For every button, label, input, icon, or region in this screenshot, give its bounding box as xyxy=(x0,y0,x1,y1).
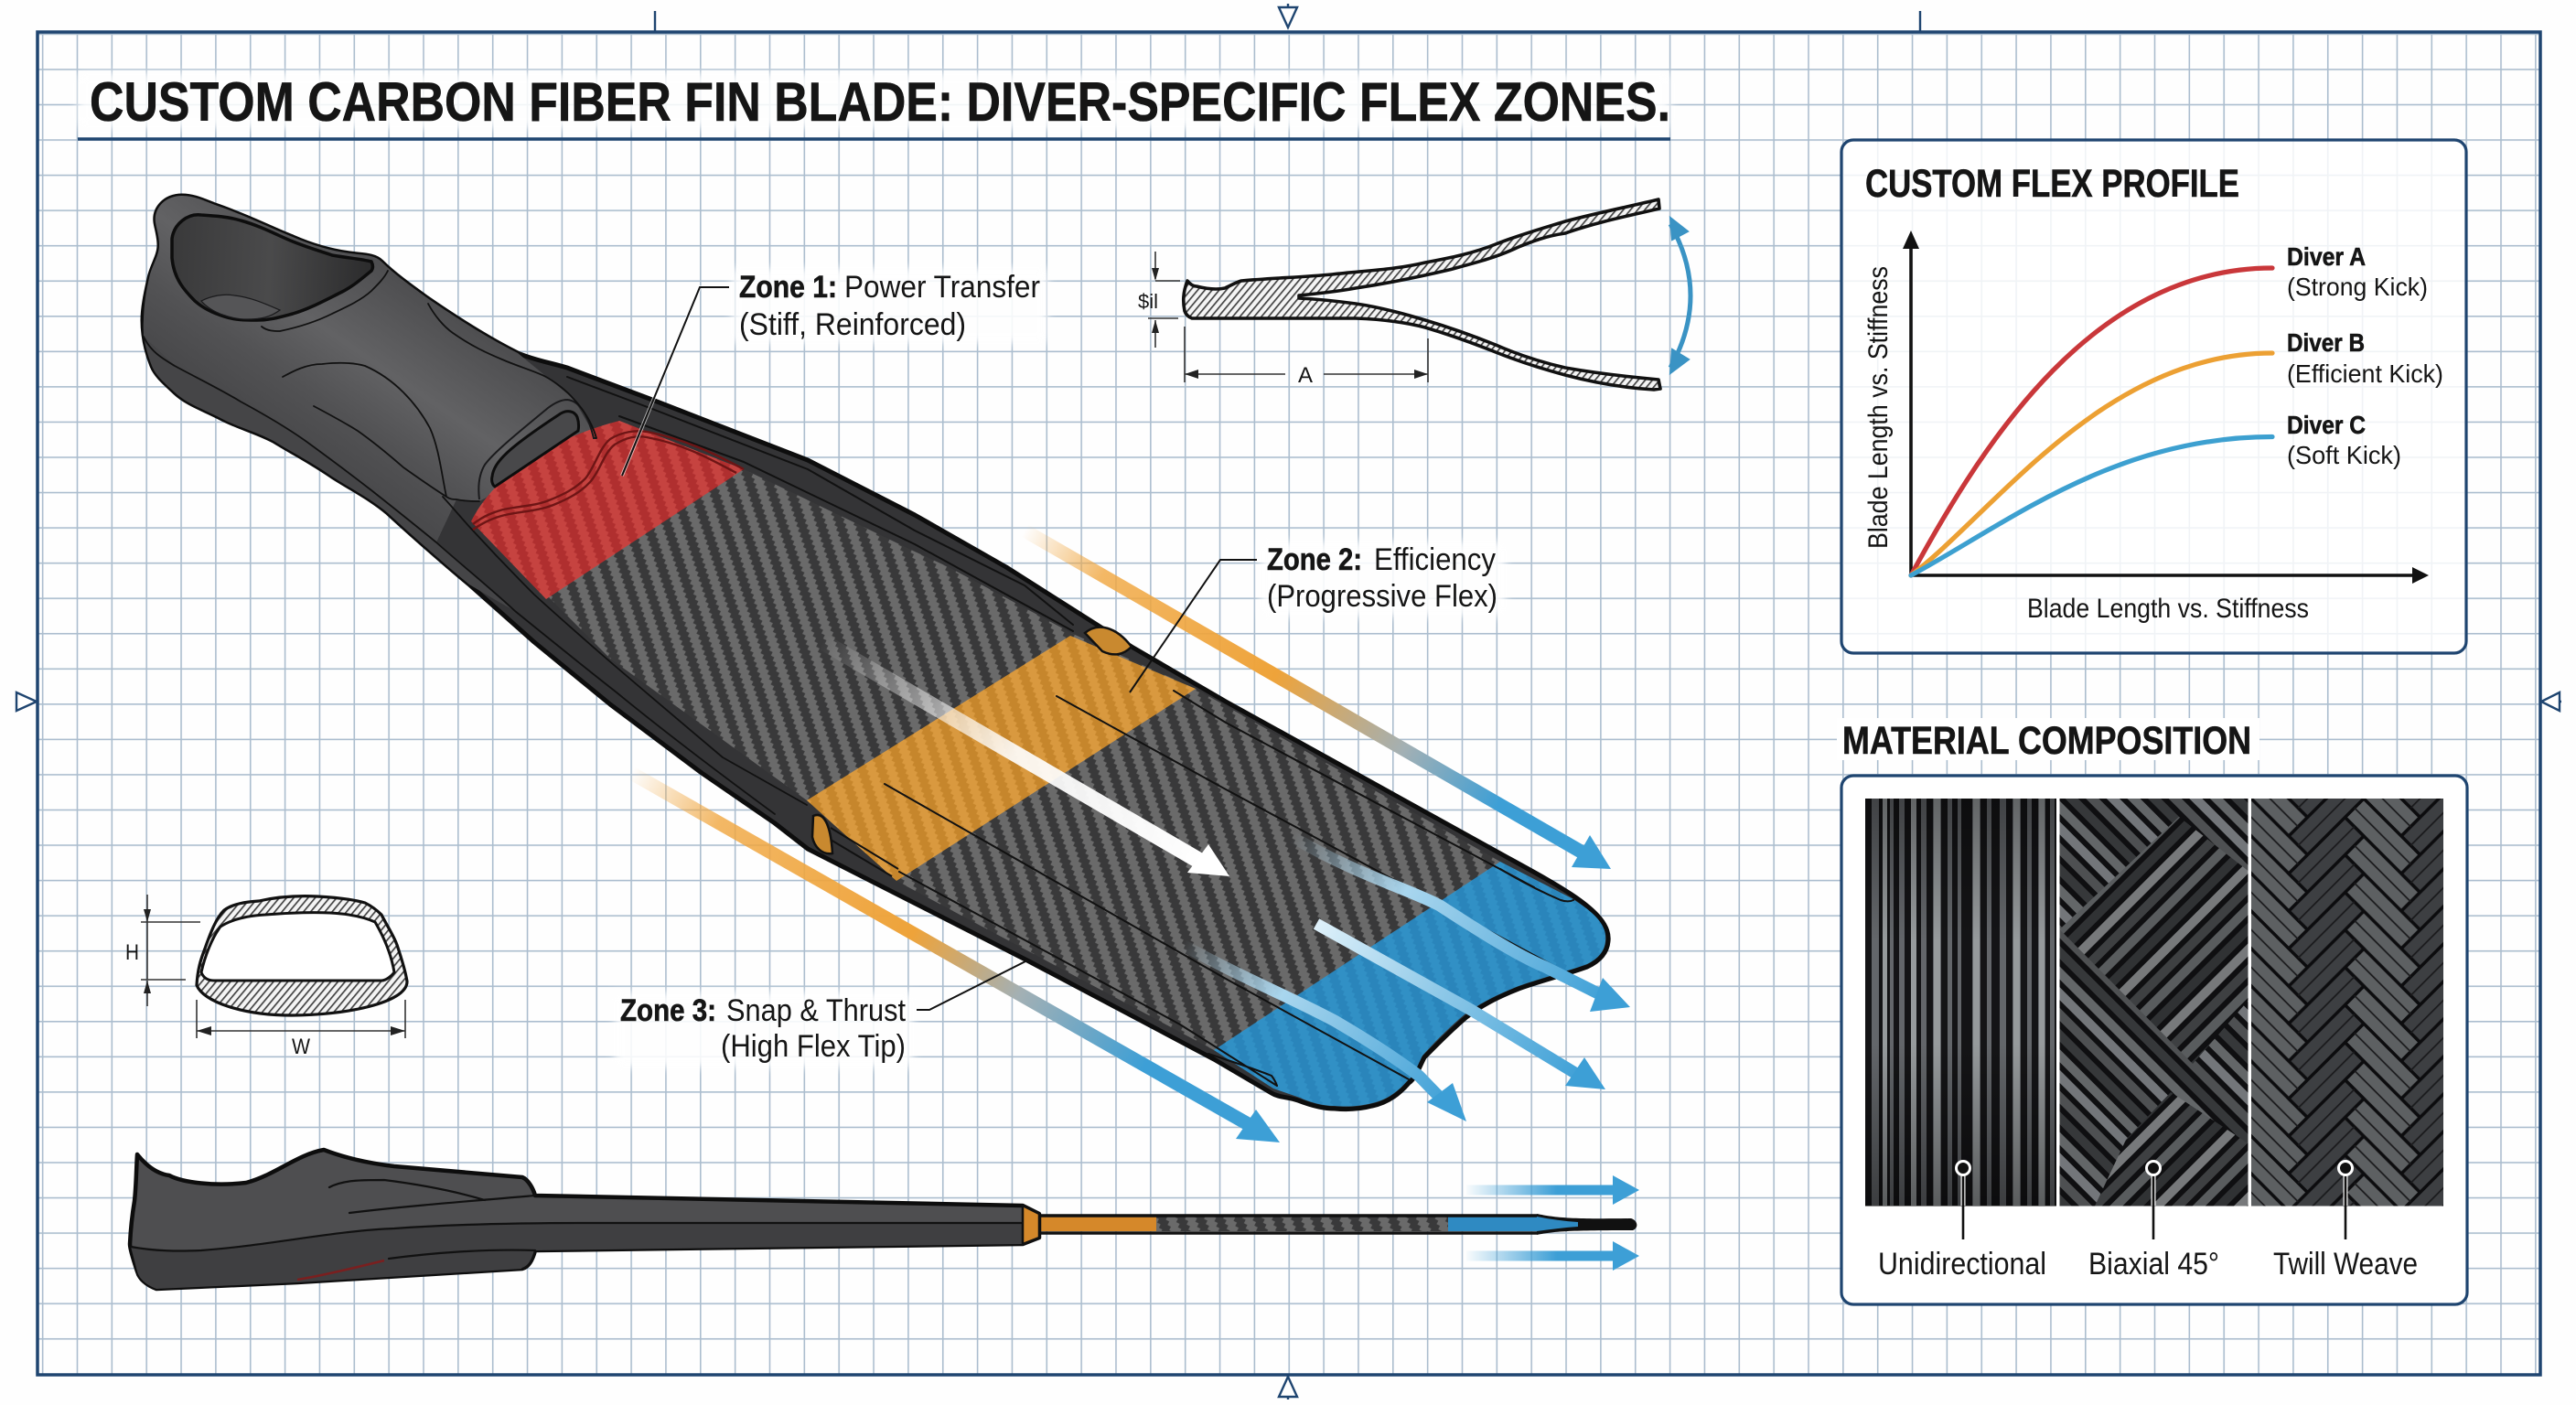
callout: zone 3: Snap & Thrust xyxy=(726,993,906,1028)
legend: diver C: Diver C xyxy=(2287,411,2366,439)
callout: zone 1: Zone 1: xyxy=(739,270,837,305)
side view spar xyxy=(1034,1214,1637,1235)
blade bending cross-section xyxy=(1138,199,1690,390)
heading: material composition: MATERIAL COMPOSITION xyxy=(1842,719,2251,763)
chart: blade length vs stiffness: Blade Length vs. Stiffness xyxy=(1863,266,1894,549)
legend: diver A xyxy=(2287,242,2428,301)
tip rail folds xyxy=(1208,869,1573,1086)
zone ripple lines xyxy=(473,431,744,530)
panel: custom flex profile xyxy=(1841,140,2466,653)
dimension: height H xyxy=(125,895,200,1006)
toe opening xyxy=(478,400,596,499)
foot opening xyxy=(172,215,373,320)
label: biaxial 45: Biaxial 45° xyxy=(2088,1247,2219,1282)
side view flow arrows xyxy=(1466,1175,1639,1271)
fin body outline xyxy=(143,196,1608,1110)
callout: zone 1 xyxy=(622,268,1047,476)
arrows: blade tip flow xyxy=(1183,837,1630,1121)
foot pocket upper xyxy=(144,196,596,542)
rail joint upper xyxy=(1085,627,1132,654)
chart: blade length vs stiffness: Blade Length vs. Stiffness xyxy=(2027,594,2309,624)
legend: diver C: (Soft Kick) xyxy=(2287,441,2401,469)
side view foot xyxy=(130,1150,1039,1289)
dimension: height H: H xyxy=(125,940,139,965)
arrow: white center flow xyxy=(823,642,1229,876)
title: CUSTOM CARBON FIBER FIN BLADE: DIVER-SPECIFIC FLEX ZONES. xyxy=(90,71,1670,133)
arrow: upper water flow xyxy=(1025,531,1611,869)
callout: zone 2 xyxy=(1130,542,1506,692)
heading: custom flex profile: CUSTOM FLEX PROFILE xyxy=(1865,162,2239,206)
dimension: width W: W xyxy=(292,1035,310,1059)
chart: blade length vs stiffness xyxy=(1863,231,2429,624)
label: unidirectional: Unidirectional xyxy=(1878,1247,2046,1282)
legend: diver A: Diver A xyxy=(2287,242,2366,271)
blade grooves xyxy=(885,696,1566,1086)
dimension: width W xyxy=(197,1000,405,1059)
label: twill weave: Twill Weave xyxy=(2273,1247,2418,1282)
side view of the fin xyxy=(130,1150,1639,1289)
foot contour lines xyxy=(144,271,807,814)
carbon blade xyxy=(471,421,1592,1079)
swatch: biaxial 45 xyxy=(2060,799,2249,1206)
callout: zone 3 xyxy=(615,960,1027,1067)
legend: diver B: (Efficient Kick) xyxy=(2287,359,2443,388)
zone 3 blue tip xyxy=(1214,862,1605,1107)
callout: zone 3: Zone 3: xyxy=(620,993,716,1028)
pin: twill xyxy=(2338,1162,2353,1239)
callout: zone 2: Zone 2: xyxy=(1267,542,1362,577)
pin: biaxial xyxy=(2146,1162,2161,1239)
dimension: thickness: $il xyxy=(1138,290,1158,313)
icon: flex range double arrow xyxy=(1670,218,1690,373)
callout: zone 2: Efficiency xyxy=(1374,542,1496,577)
legend: diver B xyxy=(2287,328,2443,388)
pin: unidirectional xyxy=(1956,1162,1970,1239)
dimension: thickness xyxy=(1138,252,1180,348)
legend: diver A: (Strong Kick) xyxy=(2287,273,2428,301)
side view lower sole xyxy=(131,1223,1023,1289)
dimension: length A xyxy=(1185,327,1428,388)
swatch: twill weave xyxy=(2251,799,2443,1206)
arrow: lower water flow xyxy=(631,773,1280,1142)
callout: zone 3: (High Flex Tip) xyxy=(721,1029,906,1064)
dimension: length A: A xyxy=(1298,363,1313,388)
panel: material composition xyxy=(1841,776,2467,1304)
legend: diver C xyxy=(2287,411,2401,469)
upper rail lines xyxy=(567,377,1534,887)
callout: zone 1: (Stiff, Reinforced) xyxy=(739,307,966,342)
main fin illustration xyxy=(143,196,1608,1110)
rail cross-section xyxy=(125,895,407,1059)
rail joint lower xyxy=(812,815,832,853)
swatch: unidirectional xyxy=(1865,799,2056,1206)
zone 2 orange xyxy=(807,636,1196,881)
callout: zone 1: Power Transfer xyxy=(844,270,1040,305)
sole band xyxy=(143,320,515,611)
callout: zone 2: (Progressive Flex) xyxy=(1267,579,1497,614)
zone 1 red xyxy=(471,421,744,599)
legend: diver B: Diver B xyxy=(2287,328,2365,357)
